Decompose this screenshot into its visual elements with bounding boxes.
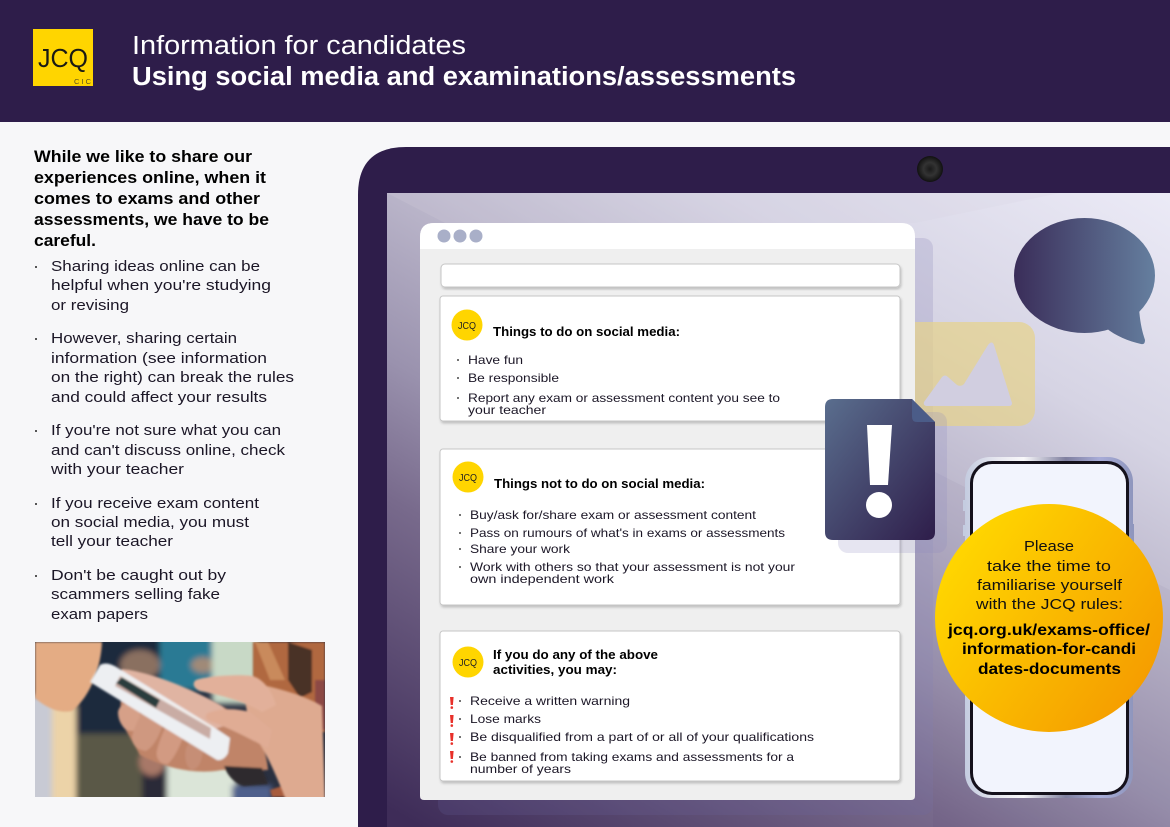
icon: JCQ badge: JCQ xyxy=(459,473,477,484)
watch xyxy=(224,766,268,786)
list with warning marks: Lose marks xyxy=(470,712,541,726)
list xyxy=(459,508,795,586)
list with warning marks xyxy=(450,694,814,776)
browser window xyxy=(420,223,915,800)
icon: JCQ badge xyxy=(452,462,484,492)
window shadow panel xyxy=(438,238,933,815)
panel: things not to do xyxy=(440,449,900,605)
icon: JCQ logo: JCQ xyxy=(38,43,88,73)
list: Buy/ask for/share exam or assessment content xyxy=(470,508,757,522)
icon: JCQ badge: JCQ xyxy=(458,321,476,332)
list xyxy=(457,353,780,417)
bullet list xyxy=(35,258,294,623)
icon: JCQ logo xyxy=(33,29,93,86)
photo: hands holding a smartphone xyxy=(35,642,325,797)
icon: speech bubble xyxy=(1014,218,1155,344)
icon: JCQ badge: JCQ xyxy=(459,658,477,669)
bullet list: and can't discuss online, check xyxy=(51,442,286,459)
panel: things to do xyxy=(440,296,900,421)
right hand xyxy=(245,685,325,800)
phone screen xyxy=(115,676,211,739)
list with warning marks: Be disqualified from a part of or all of your qualifications xyxy=(470,730,814,744)
intro heading: comes to exams and other xyxy=(34,190,261,208)
plaid shirt xyxy=(253,642,325,797)
bullet list: Sharing ideas online can be xyxy=(51,258,260,275)
list: own independent work xyxy=(470,572,615,586)
callout: JCQ rules: dates-documents xyxy=(978,661,1121,678)
intro heading: While we like to share our xyxy=(34,148,253,166)
bullet list: tell your teacher xyxy=(51,533,173,550)
bullet list: If you're not sure what you can xyxy=(51,422,281,439)
heading: Things not to do on social media: xyxy=(494,477,705,491)
header banner xyxy=(0,0,1170,122)
bullet list: If you receive exam content xyxy=(51,495,260,512)
forearm xyxy=(35,642,102,712)
icon: JCQ logo: CIC xyxy=(74,77,92,86)
list with warning marks: number of years xyxy=(470,762,571,776)
intro heading: assessments, we have to be xyxy=(34,211,269,229)
intro heading: experiences online, when it xyxy=(34,169,267,187)
bullet list: scammers selling fake xyxy=(51,586,220,603)
window control dots xyxy=(438,230,482,242)
intro heading: careful. xyxy=(34,232,96,250)
callout: JCQ rules: familiarise yourself xyxy=(977,577,1123,594)
icon: JCQ badge xyxy=(452,646,484,678)
icon: JCQ badge xyxy=(452,310,482,340)
bullet list: exam papers xyxy=(51,606,148,623)
title: Using social media and examinations/assessments xyxy=(132,63,796,91)
laptop illustration xyxy=(358,147,1170,827)
bullet list: with your teacher xyxy=(50,461,184,478)
callout: JCQ rules: jcq.org.uk/exams-office/ xyxy=(947,622,1151,639)
callout: JCQ rules: take the time to xyxy=(987,558,1111,575)
palm behind phone xyxy=(119,700,270,773)
icon: webcam xyxy=(917,156,943,182)
icon: alert document xyxy=(825,399,947,553)
heading: Things to do on social media: xyxy=(493,325,680,339)
bullet list: helpful when you're studying xyxy=(51,277,271,294)
heading: activities, you may: xyxy=(493,663,617,677)
list with warning marks: Be banned from taking exams and assessments for a xyxy=(470,750,794,764)
bullet list: However, sharing certain xyxy=(51,330,237,347)
list: Have fun xyxy=(468,353,523,367)
callout: JCQ rules: information-for-candi xyxy=(962,641,1136,658)
callout: JCQ rules: Please xyxy=(1024,538,1074,555)
list: Pass on rumours of what's in exams or assessments xyxy=(470,526,785,540)
title: Information for candidates xyxy=(132,32,466,60)
title xyxy=(132,32,796,91)
list with warning marks: Receive a written warning xyxy=(470,694,630,708)
laptop screen xyxy=(387,193,1170,827)
bullet list: on social media, you must xyxy=(51,514,250,531)
callout: JCQ rules: with the JCQ rules: xyxy=(975,596,1123,613)
panel: consequences xyxy=(440,631,900,781)
heading: If you do any of the above xyxy=(493,648,658,662)
bullet list: Don't be caught out by xyxy=(51,567,227,584)
intro heading xyxy=(34,148,269,250)
callout: JCQ rules xyxy=(935,504,1163,732)
address bar xyxy=(441,264,900,287)
bullet list: information (see information xyxy=(51,350,267,367)
list: Share your work xyxy=(470,542,571,556)
bullet list: or revising xyxy=(51,297,129,314)
bullet list: on the right) can break the rules xyxy=(51,369,294,386)
icon: picture xyxy=(880,322,1035,426)
panel: introduction text xyxy=(34,148,294,623)
laptop frame xyxy=(358,147,1170,827)
list: your teacher xyxy=(468,403,546,417)
list: Work with others so that your assessment is not your xyxy=(470,560,795,574)
phone illustration xyxy=(963,457,1134,798)
list: Report any exam or assessment content you see to xyxy=(468,391,780,405)
bullet list: and could affect your results xyxy=(51,389,267,406)
phone body xyxy=(90,664,230,760)
fingers xyxy=(118,703,143,731)
list: Be responsible xyxy=(468,371,559,385)
heading xyxy=(493,648,658,677)
